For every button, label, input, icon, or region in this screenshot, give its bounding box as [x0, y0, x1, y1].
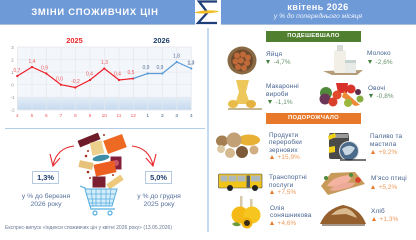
goods	[77, 133, 127, 189]
banner: more expensive	[266, 113, 361, 124]
item: eggs	[228, 46, 291, 74]
icon: oil bottles	[232, 196, 260, 228]
y axis labels: -2	[10, 108, 15, 114]
arrow: right	[132, 146, 156, 167]
year label 2026: 2026	[153, 36, 170, 45]
value labels 2025: 0,9	[41, 66, 48, 72]
label	[269, 132, 302, 154]
label: Макаронні	[266, 83, 299, 90]
arrow: left	[50, 146, 74, 167]
value labels 2025: 0,5	[128, 70, 135, 76]
value labels 2025: 0,4	[86, 72, 93, 78]
item: fuel	[328, 133, 402, 161]
value: -2,6%	[376, 59, 393, 66]
item: poultry	[321, 172, 407, 195]
stat box: december	[145, 171, 172, 184]
source note: Експрес-випуск «Індекси споживчих цін у квітні 2026 року» (13.05.2026)	[5, 224, 172, 230]
icon: eggs basket	[228, 46, 256, 74]
line 2026	[133, 61, 192, 78]
x axis labels: 6	[45, 113, 48, 119]
banner: cheaper: ПОДЕШЕВШАЛО	[287, 33, 340, 39]
icon: pasta	[228, 80, 262, 110]
value: -4,7%	[274, 59, 291, 66]
icon: grains	[216, 132, 260, 158]
stat box: december: 5,0%	[150, 173, 167, 182]
value: -1,1%	[276, 98, 293, 106]
label	[266, 83, 299, 98]
line chart	[10, 36, 195, 119]
label: Продукти	[269, 132, 298, 139]
y axis labels: 1	[11, 70, 14, 76]
banner: more expensive: ПОДОРОЖЧАЛО	[288, 115, 339, 121]
y axis labels: 2	[11, 58, 14, 64]
item: transport	[218, 174, 307, 196]
logo: sigma	[195, 0, 221, 25]
label: Хліб	[371, 208, 385, 215]
label: Молоко	[367, 50, 391, 57]
icon: chicken fillet	[321, 172, 365, 195]
value labels 2025	[14, 59, 135, 85]
value: +15,9%	[278, 154, 300, 160]
stat caption: december: у % до грудня	[137, 193, 181, 200]
header band	[0, 0, 416, 25]
stat caption: month: у % до березня	[22, 193, 70, 200]
label: мастила	[370, 141, 396, 148]
label: послуги	[269, 182, 293, 189]
label: Олія	[270, 205, 284, 212]
label: М'ясо птиці	[371, 175, 407, 182]
cart	[80, 186, 117, 215]
icon: vegetables	[320, 83, 364, 107]
period heading: квітень 2026	[287, 2, 349, 12]
x axis labels	[16, 113, 136, 119]
value: +5,2%	[378, 184, 397, 190]
label	[270, 205, 312, 219]
year label 2025: 2025	[66, 36, 83, 45]
label: Яйця	[266, 51, 282, 58]
x axis labels: 8	[74, 113, 77, 119]
value labels 2025: 1,4	[29, 59, 36, 65]
value: -0,8%	[376, 92, 394, 100]
icon: fuel barrel and globe	[328, 133, 366, 161]
y axis labels: -1	[10, 95, 15, 101]
value labels 2025: 0,0	[56, 76, 63, 82]
item: bread	[320, 205, 398, 226]
title: ЗМІНИ СПОЖИВЧИХ ЦІН	[31, 6, 159, 17]
x axis labels: 5	[31, 113, 34, 119]
icon: milk	[323, 45, 363, 75]
label: Транспортні	[269, 174, 307, 181]
banner: cheaper	[266, 31, 361, 42]
line chart: 3	[175, 113, 178, 119]
value labels 2026: 1,3	[188, 60, 195, 66]
x axis labels: 10	[102, 113, 107, 119]
value labels 2026: 0,9	[143, 65, 150, 71]
stat caption: december: 2025 року	[143, 201, 175, 208]
value labels 2025: 0,7	[14, 68, 21, 74]
stat caption: december	[137, 193, 181, 208]
x axis labels: 4	[16, 113, 19, 119]
item: sunflower oil	[232, 196, 312, 228]
value: +7,5%	[278, 188, 296, 196]
value labels 2026: 1,8	[173, 54, 180, 60]
line 2025	[16, 66, 134, 89]
value: +1,3%	[380, 216, 398, 222]
label	[269, 174, 307, 189]
stat caption: month: 2026 року	[30, 201, 62, 208]
y axis labels	[10, 45, 15, 114]
value: +9,2%	[378, 148, 397, 156]
x axis labels: 12	[131, 113, 136, 119]
x axis labels: 11	[117, 113, 122, 119]
value labels 2026	[143, 54, 195, 71]
label: Овочі	[368, 85, 385, 92]
icon: yellow bus	[218, 174, 262, 191]
label: соняшникова	[270, 212, 312, 219]
label: вироби	[266, 91, 289, 98]
stat caption: month	[22, 193, 70, 208]
stat box: month	[32, 171, 59, 184]
value labels 2025: 1,3	[101, 60, 108, 66]
period subtitle: у % до попереднього місяця	[274, 13, 362, 20]
value labels 2026: 0,9	[157, 65, 164, 71]
label: переробки	[269, 139, 302, 146]
value labels 2025: -0,2	[71, 79, 80, 85]
item: pasta	[228, 80, 299, 110]
x axis labels: 7	[60, 113, 63, 119]
y axis labels: 0	[11, 82, 14, 88]
label: Паливо та	[370, 133, 402, 140]
label	[370, 133, 402, 148]
x axis labels: 9	[89, 113, 92, 119]
label: зернових	[269, 147, 298, 154]
item: milk	[323, 45, 393, 75]
line chart: 4	[190, 113, 193, 119]
stat box: month: 1,3%	[37, 173, 54, 182]
icon: shopping cart with falling goods	[78, 132, 127, 216]
item: grain products	[216, 132, 302, 160]
icon: bread	[320, 205, 366, 226]
value: +4,6%	[278, 220, 296, 226]
value labels 2025: 0,4	[114, 72, 121, 78]
line chart: 1	[146, 113, 149, 119]
item: vegetables	[320, 83, 394, 107]
line chart: 2	[161, 113, 164, 119]
y axis labels: 3	[11, 45, 14, 51]
